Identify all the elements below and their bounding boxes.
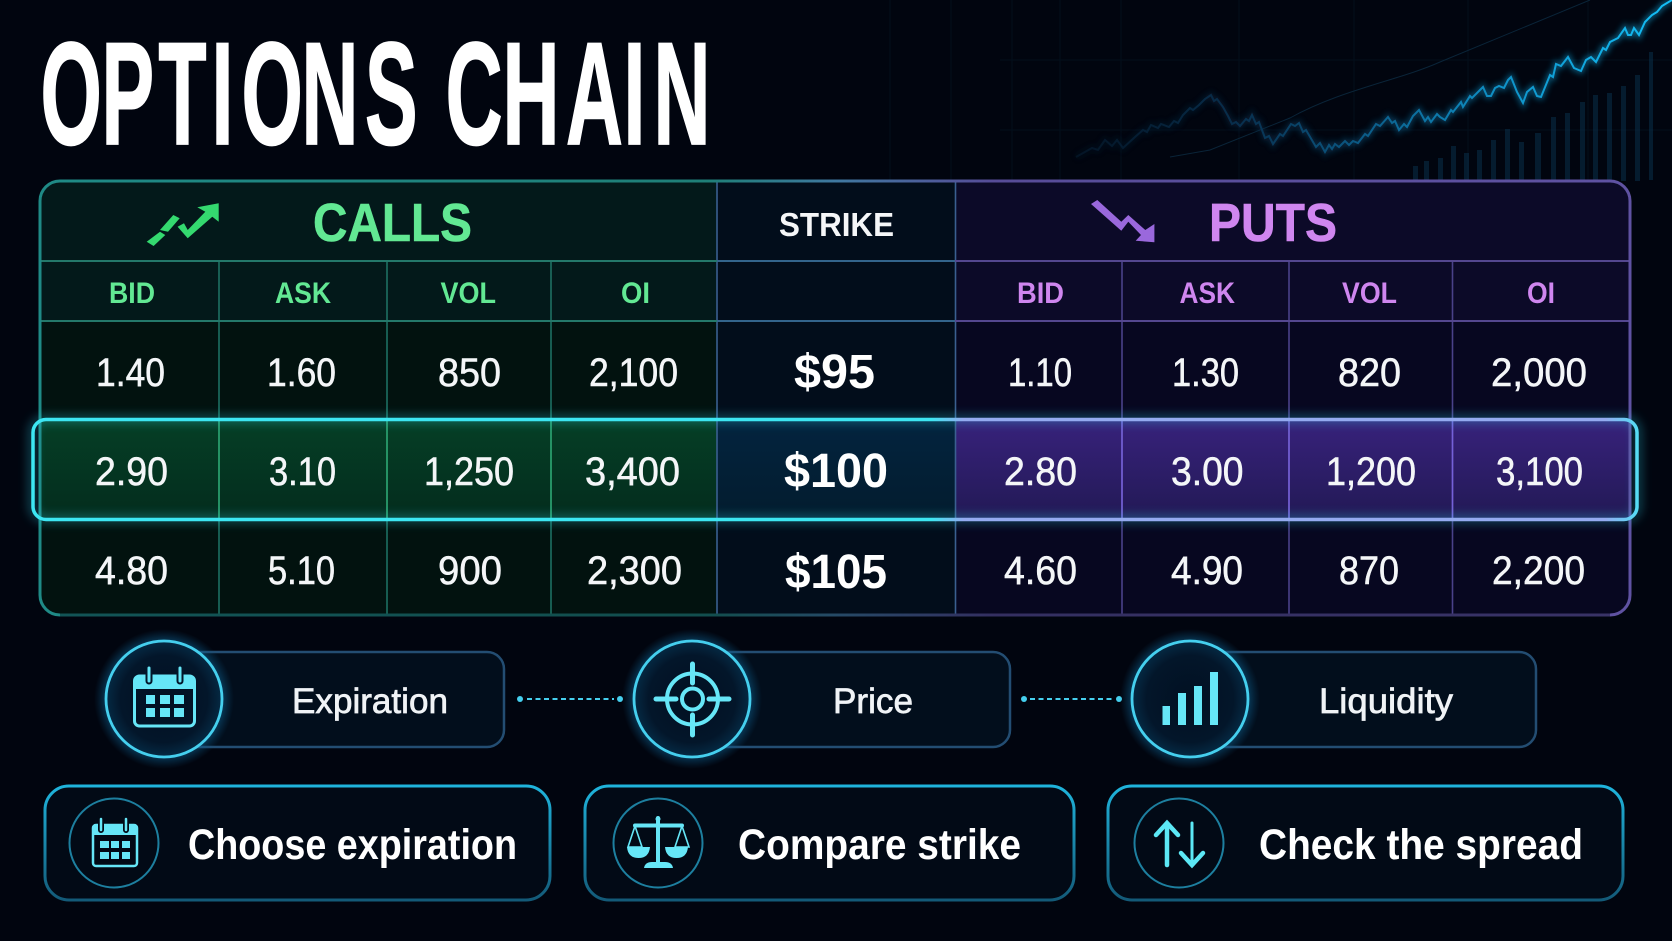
background chart	[890, 0, 1672, 181]
icon: trending up arrow	[147, 203, 219, 246]
row: strike 105: 870	[1339, 549, 1399, 593]
row: strike 95	[96, 346, 1587, 399]
step card: choose expiration	[45, 786, 550, 900]
row: strike 105: 4.60	[1004, 549, 1077, 593]
factor: price	[622, 629, 1010, 769]
row: strike 105: 5.10	[268, 549, 335, 593]
row: strike 95: $95	[794, 346, 875, 399]
row: strike 105: 900	[438, 549, 502, 593]
icon: target	[656, 664, 729, 735]
calls header	[147, 193, 472, 253]
calls column headings: BID	[109, 277, 155, 310]
row: strike 100 highlighted: $100	[784, 445, 888, 498]
row: strike 100 highlighted: 3,100	[1496, 450, 1583, 494]
step card: compare strike: Compare strike	[738, 821, 1021, 869]
row: strike 105: $105	[785, 546, 887, 599]
connector: price to liquidity	[1021, 696, 1122, 702]
calls column headings: VOL	[440, 277, 496, 310]
row: strike 95: 1.10	[1008, 351, 1072, 395]
icon: trending down arrow	[1091, 200, 1154, 242]
row: strike 95: 2,000	[1491, 351, 1587, 395]
factor: price: Price	[833, 682, 913, 721]
row: strike 95: 1.30	[1172, 351, 1239, 395]
factor: expiration: Expiration	[292, 682, 448, 721]
icon: signal bars	[1162, 672, 1218, 725]
connector: expiration to price	[517, 696, 623, 702]
row: strike 95: 2,100	[589, 351, 678, 395]
step card: check the spread: Check the spread	[1259, 821, 1583, 869]
row: strike 100 highlighted: 2.90	[95, 450, 168, 494]
puts column headings: OI	[1527, 277, 1555, 310]
row: strike 95: 820	[1338, 351, 1401, 395]
icon: calendar	[134, 668, 195, 726]
row: strike 100 highlighted	[95, 445, 1583, 498]
icon: calendar small	[92, 819, 138, 866]
row: strike 100 highlighted: 3,400	[585, 450, 680, 494]
highlighted row outline	[32, 419, 1638, 520]
puts column headings: BID	[1017, 277, 1064, 310]
calls column headings	[109, 277, 650, 310]
row: strike 100 highlighted: 3.00	[1171, 450, 1244, 494]
step card: choose expiration: Choose expiration	[188, 821, 517, 869]
row: strike 105	[95, 546, 1585, 599]
puts header	[1091, 193, 1337, 253]
puts column headings: ASK	[1180, 277, 1235, 310]
factor: liquidity: Liquidity	[1319, 682, 1454, 721]
step card: check the spread	[1108, 786, 1623, 900]
calls column headings: ASK	[275, 277, 331, 310]
row: strike 95: 1.40	[96, 351, 165, 395]
puts column headings: VOL	[1342, 277, 1397, 310]
row: strike 95: 850	[438, 351, 501, 395]
icon: balance scales	[627, 816, 689, 868]
factor: liquidity	[1120, 629, 1536, 769]
row: strike 105: 2,300	[587, 549, 682, 593]
row: strike 105: 4.80	[95, 549, 168, 593]
row: strike 105: 2,200	[1492, 549, 1585, 593]
row: strike 100 highlighted: 1,200	[1326, 450, 1416, 494]
row: strike 100 highlighted: 1,250	[424, 450, 514, 494]
title: OPTIONS CHAIN	[41, 12, 710, 175]
icon: up and down arrows	[1156, 823, 1203, 865]
calls column headings: OI	[621, 277, 650, 310]
row: strike 105: 4.90	[1171, 549, 1243, 593]
step card: compare strike	[585, 786, 1074, 900]
row: strike 100 highlighted: 2.80	[1004, 450, 1077, 494]
puts column headings	[1017, 277, 1555, 310]
row: strike 100 highlighted: 3.10	[269, 450, 336, 494]
options chain table	[32, 181, 1638, 615]
strike header: STRIKE	[779, 206, 894, 243]
row: strike 95: 1.60	[267, 351, 336, 395]
calls header: CALLS	[313, 193, 472, 253]
factor: expiration	[94, 629, 504, 769]
puts header: PUTS	[1209, 193, 1337, 253]
